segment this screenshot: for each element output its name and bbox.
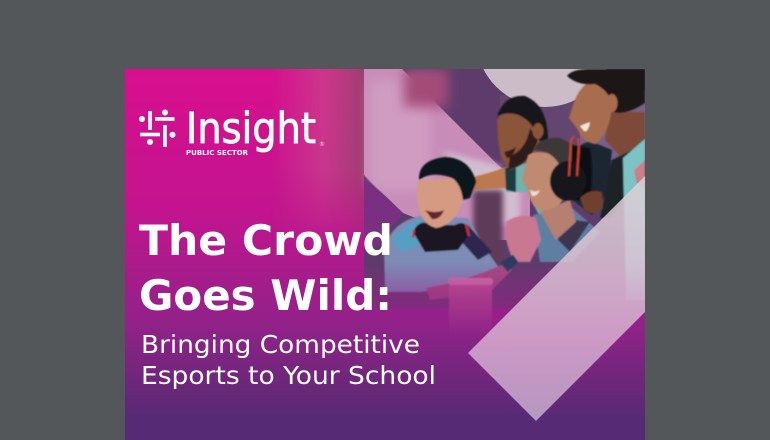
logo registered mark: ® <box>319 141 325 148</box>
photo: esports players <box>362 69 645 322</box>
title: Goes Wild: <box>139 271 392 320</box>
shape: large pale diamond <box>468 176 645 421</box>
shape: lilac diagonal band <box>364 69 530 240</box>
photo: blurred background glow <box>282 69 364 232</box>
logo: Insight Public Sector <box>139 104 325 157</box>
shape: pale circle <box>483 69 606 107</box>
person: man with headphones <box>505 136 603 262</box>
subtitle: Esports to Your School <box>141 361 436 390</box>
person: man with beard <box>473 94 561 215</box>
panel: cover background <box>125 69 645 440</box>
logo sublabel: PUBLIC SECTOR <box>186 149 249 157</box>
logo wordmark: Insight <box>186 104 316 154</box>
subtitle <box>141 330 436 390</box>
title <box>139 216 393 320</box>
title: The Crowd <box>139 216 393 265</box>
subtitle: Bringing Competitive <box>141 330 420 359</box>
icon: Insight mark <box>139 110 176 147</box>
person: woman at right <box>566 69 645 298</box>
person: young man with headset <box>384 157 518 339</box>
